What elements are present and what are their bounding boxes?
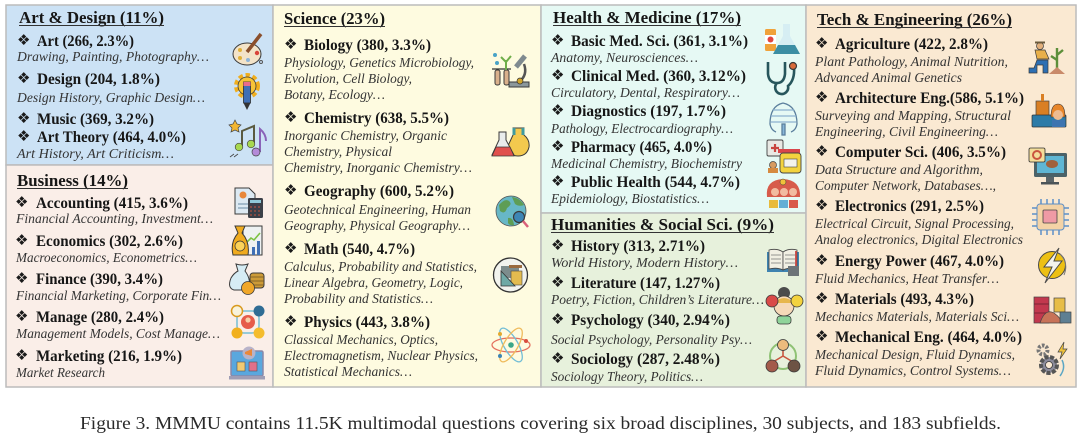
subject: Electronics [814, 196, 1024, 248]
heading: Science: Science (23%) [284, 9, 385, 28]
subject: Computer Sci.: Computer Network, Databases…, [815, 179, 996, 194]
subject: Art: Art (266, 2.3%) [37, 33, 134, 50]
subject: Chemistry [283, 108, 472, 176]
subject: Art: Drawing, Painting, Photography… [16, 50, 209, 65]
subject: Biology: ❖ [284, 35, 297, 53]
subject: Geography [284, 181, 471, 234]
subject: Electronics: Electrical Circuit, Signal Processing, [814, 217, 1014, 232]
subject: Accounting: Financial Accounting, Investment… [15, 212, 213, 227]
subject: Finance [15, 269, 221, 304]
subject: Biology: Evolution, Cell Biology, [283, 72, 412, 87]
subject: Literature [550, 273, 764, 308]
panel: Health & Medicine [541, 5, 806, 213]
subject: Geography: Geography, Physical Geography… [284, 219, 470, 234]
icon: biology microscope and plant [492, 53, 529, 87]
subject: Biology: Botany, Ecology… [284, 88, 385, 103]
icon: finance bag and coins [230, 264, 264, 294]
icon: marketing laptop [229, 346, 265, 380]
icon: gears [1038, 342, 1067, 376]
subject: History: History (313, 2.71%) [571, 238, 705, 255]
subject: Architecture Eng. [814, 88, 1024, 140]
subject: Math: ❖ [284, 239, 297, 257]
subject: Basic Med. Sci.: ❖ [551, 31, 564, 49]
subject: Marketing: Market Research [15, 366, 105, 381]
subject: Pharmacy: Pharmacy (465, 4.0%) [571, 139, 712, 156]
icon: geography globe [496, 196, 528, 227]
subject: Pharmacy: ❖ [551, 137, 564, 155]
subject: Chemistry: Inorganic Chemistry, Organic [283, 129, 448, 144]
icon: management network [232, 306, 264, 338]
icon: microchip [1032, 199, 1069, 235]
subject: Accounting: ❖ [15, 193, 28, 211]
subject: Computer Sci. [814, 142, 1006, 194]
icon: materials pile [1034, 297, 1071, 323]
subject: History [551, 236, 738, 271]
icon: lightning [1038, 248, 1066, 283]
subject: Music: ❖ [17, 109, 30, 127]
subject: Marketing [15, 346, 182, 381]
subject: Economics: ❖ [15, 231, 28, 249]
subject: Chemistry: ❖ [284, 108, 297, 126]
heading: Tech & Engineering: Tech & Engineering (26%) [817, 10, 1012, 29]
subject: Diagnostics: ❖ [551, 101, 564, 119]
subject: Geography: ❖ [284, 181, 297, 199]
subject: Art Theory [16, 127, 186, 162]
subject: Biology: Physiology, Genetics Microbiology, [283, 56, 474, 71]
subject: Sociology: Sociology (287, 2.48%) [571, 351, 720, 368]
subject: Manage: ❖ [15, 307, 28, 325]
subject: Public Health [550, 172, 740, 207]
subject: Psychology: ❖ [551, 310, 564, 328]
subject: Design: Design (204, 1.8%) [37, 71, 160, 88]
panel: Humanities & Social Sci. [541, 213, 806, 387]
subject: Architecture Eng.: Surveying and Mapping, Structural [815, 109, 1011, 124]
subject: Sociology: ❖ [551, 349, 564, 367]
subject: Geography: Geotechnical Engineering, Human [284, 203, 471, 218]
subject: Art Theory: Art History, Art Criticism… [16, 147, 174, 162]
subject: Economics: Macroeconomics, Econometrics… [15, 251, 197, 266]
subject: Physics: Electromagnetism, Nuclear Physics, [283, 349, 478, 364]
subject: Agriculture [814, 34, 1008, 86]
icon: farmer and plant [1029, 42, 1065, 74]
subject: Design [16, 69, 205, 106]
subject: Design: Design History, Graphic Design… [16, 91, 205, 106]
subject: Mechanical Eng.: Mechanical Eng. (464, 4.0%) [835, 329, 1022, 346]
subject: Math: Calculus, Probability and Statistics, [284, 260, 477, 275]
subject: Physics: ❖ [284, 312, 297, 330]
subject: Biology [283, 35, 474, 103]
subject: Computer Sci.: Data Structure and Algorithm, [814, 163, 983, 178]
subject: Finance: Financial Marketing, Corporate Fin… [15, 289, 221, 304]
subject: Pharmacy: Medicinal Chemistry, Biochemistry [550, 157, 743, 172]
subject: Psychology [551, 310, 752, 348]
subject: Finance: Finance (390, 3.4%) [36, 271, 163, 288]
subject: Diagnostics [550, 101, 733, 137]
subject: Electronics: Analog electronics, Digital Electronics [814, 233, 1024, 248]
subject: Architecture Eng.: Architecture Eng.(586, 5.1%) [835, 90, 1024, 107]
icon: chemistry flasks [492, 128, 529, 156]
subject: Art: ❖ [17, 31, 30, 49]
subject: Basic Med. Sci. [550, 31, 748, 66]
subject: Literature: Literature (147, 1.27%) [571, 275, 720, 292]
icon: music notes [229, 120, 266, 157]
subject: Mechanical Eng.: ❖ [815, 327, 828, 345]
panel: Art & Design [6, 5, 273, 165]
icon: physics atom [492, 325, 530, 365]
subject: Sociology [551, 349, 720, 385]
icon: people circle [766, 340, 800, 372]
subject: Manage [15, 307, 220, 342]
subject: History: World History, Modern History… [551, 256, 738, 271]
icon: math tools [494, 258, 528, 292]
caption: Figure 3. MMMU contains 11.5K multimodal questions covering six broad disciplines, 30 subjects, and 183 subfields. [80, 413, 1001, 433]
subject: Math: Linear Algebra, Geometry, Logic, [283, 276, 463, 291]
subject: Art [16, 31, 209, 65]
subject: Energy Power: Energy Power (467, 4.0%) [835, 253, 1004, 270]
subject: Literature: ❖ [551, 273, 564, 291]
heading: Humanities & Social Sci.: Humanities & Social Sci. (9%) [551, 215, 774, 234]
subject: Marketing: Marketing (216, 1.9%) [36, 348, 182, 365]
subject: Computer Sci.: Computer Sci. (406, 3.5%) [835, 144, 1006, 161]
icon: open book [767, 249, 799, 276]
subject: Computer Sci.: ❖ [815, 142, 828, 160]
subject: Psychology: Psychology (340, 2.94%) [571, 312, 730, 329]
subject: Economics: Economics (302, 2.6%) [36, 233, 183, 250]
icon: medicine and flask [765, 24, 800, 54]
heading: Health & Medicine: Health & Medicine (17%) [553, 8, 741, 27]
subject: Physics: Physics (443, 3.8%) [304, 314, 430, 331]
subject: Physics: Statistical Mechanics… [284, 365, 412, 380]
subject: Mechanical Eng.: Mechanical Design, Fluid Dynamics, [814, 348, 1015, 363]
subject: Electronics: ❖ [815, 196, 828, 214]
subject: Energy Power: Fluid Mechanics, Heat Transfer… [814, 272, 999, 287]
subject: Public Health: Public Health (544, 4.7%) [571, 174, 740, 191]
icon: architecture engineer [1032, 94, 1066, 127]
icon: computer monitor [1029, 148, 1067, 184]
subject: Music: Music (369, 3.2%) [37, 111, 154, 128]
panel: Business [6, 165, 273, 387]
subject: Clinical Med. [551, 66, 746, 101]
subject: Art Theory: ❖ [17, 127, 30, 145]
subject: Accounting [15, 193, 213, 227]
subject: Manage: Management Models, Cost Manage… [15, 327, 220, 342]
subject: Economics [15, 231, 197, 266]
subject: Diagnostics: Diagnostics (197, 1.7%) [571, 103, 726, 120]
subject: Public Health: ❖ [551, 172, 564, 190]
subject: Architecture Eng.: Engineering, Civil Engineering… [814, 125, 998, 140]
subject: Energy Power [814, 251, 1004, 287]
heading: Business: Business (14%) [17, 171, 128, 190]
subject: Physics: Classical Mechanics, Optics, [284, 333, 438, 348]
subject: Agriculture: Plant Pathology, Animal Nutrition, [814, 55, 1008, 70]
subject: Mechanical Eng.: Fluid Dynamics, Control Systems… [814, 364, 1011, 379]
subject: Clinical Med.: Circulatory, Dental, Respiratory… [551, 86, 740, 101]
subject: Architecture Eng.: ❖ [815, 88, 828, 106]
subject: Math: Probability and Statistics… [283, 292, 433, 307]
subject: Chemistry: Chemistry (638, 5.5%) [304, 110, 449, 127]
subject: Energy Power: ❖ [815, 251, 828, 269]
subject: Clinical Med.: ❖ [551, 66, 564, 84]
subject: Finance: ❖ [15, 269, 28, 287]
subject: Physics [283, 312, 478, 380]
subject: Marketing: ❖ [15, 346, 28, 364]
icon: public health group [767, 179, 800, 208]
subject: Agriculture: Agriculture (422, 2.8%) [835, 36, 988, 53]
icon: gear and pencil [237, 76, 257, 110]
subject: Electronics: Electronics (291, 2.5%) [835, 198, 984, 215]
subject: Manage: Manage (280, 2.4%) [36, 309, 164, 326]
subject: History: ❖ [551, 236, 564, 254]
subject: Chemistry: Chemistry, Physical [284, 145, 392, 160]
subject: Design: ❖ [17, 69, 30, 87]
subject: Art Theory: Art Theory (464, 4.0%) [37, 129, 186, 146]
subject: Math: Math (540, 4.7%) [304, 241, 415, 258]
panel: Tech & Engineering [806, 5, 1076, 387]
subject: Materials [814, 289, 1019, 325]
icon: ribcage [770, 103, 797, 135]
subject: Sociology: Sociology Theory, Politics… [551, 370, 703, 385]
subject: Chemistry: Chemistry, Inorganic Chemistry… [284, 161, 472, 176]
subject: Basic Med. Sci.: Anatomy, Neurosciences… [550, 51, 698, 66]
subject: Math [283, 239, 477, 307]
icon: paint palette [233, 34, 262, 65]
subject: Materials: ❖ [815, 289, 828, 307]
icon: pharmacy jar [767, 140, 801, 173]
subject: Basic Med. Sci.: Basic Med. Sci. (361, 3.1%) [571, 33, 748, 50]
icon: accounting calculator [235, 188, 263, 218]
subject: Geography: Geography (600, 5.2%) [304, 183, 454, 200]
icon: stethoscope [768, 62, 796, 94]
subject: Public Health: Epidemiology, Biostatistics… [550, 192, 709, 207]
subject: Materials: Mechanics Materials, Materials Sci… [814, 310, 1019, 325]
subject: Psychology: Social Psychology, Personality Psy… [551, 333, 752, 348]
subject: Diagnostics: Pathology, Electrocardiography… [550, 122, 733, 137]
heading: Art & Design: Art & Design (11%) [19, 8, 164, 27]
subject: Clinical Med.: Clinical Med. (360, 3.12%) [571, 68, 746, 85]
subject: Biology: Biology (380, 3.3%) [304, 37, 431, 54]
icon: economics money bag and chart [232, 226, 262, 255]
subject: Literature: Poetry, Fiction, Children’s Literature… [550, 293, 764, 308]
subject: Agriculture: Advanced Animal Genetics [814, 71, 963, 86]
subject: Pharmacy [550, 137, 743, 172]
subject: Agriculture: ❖ [815, 34, 828, 52]
panel: Science [273, 5, 541, 387]
subject: Accounting: Accounting (415, 3.6%) [36, 195, 188, 212]
subject: Materials: Materials (493, 4.3%) [835, 291, 974, 308]
icon: head with emotions [766, 287, 803, 324]
subject: Mechanical Eng. [814, 327, 1022, 379]
